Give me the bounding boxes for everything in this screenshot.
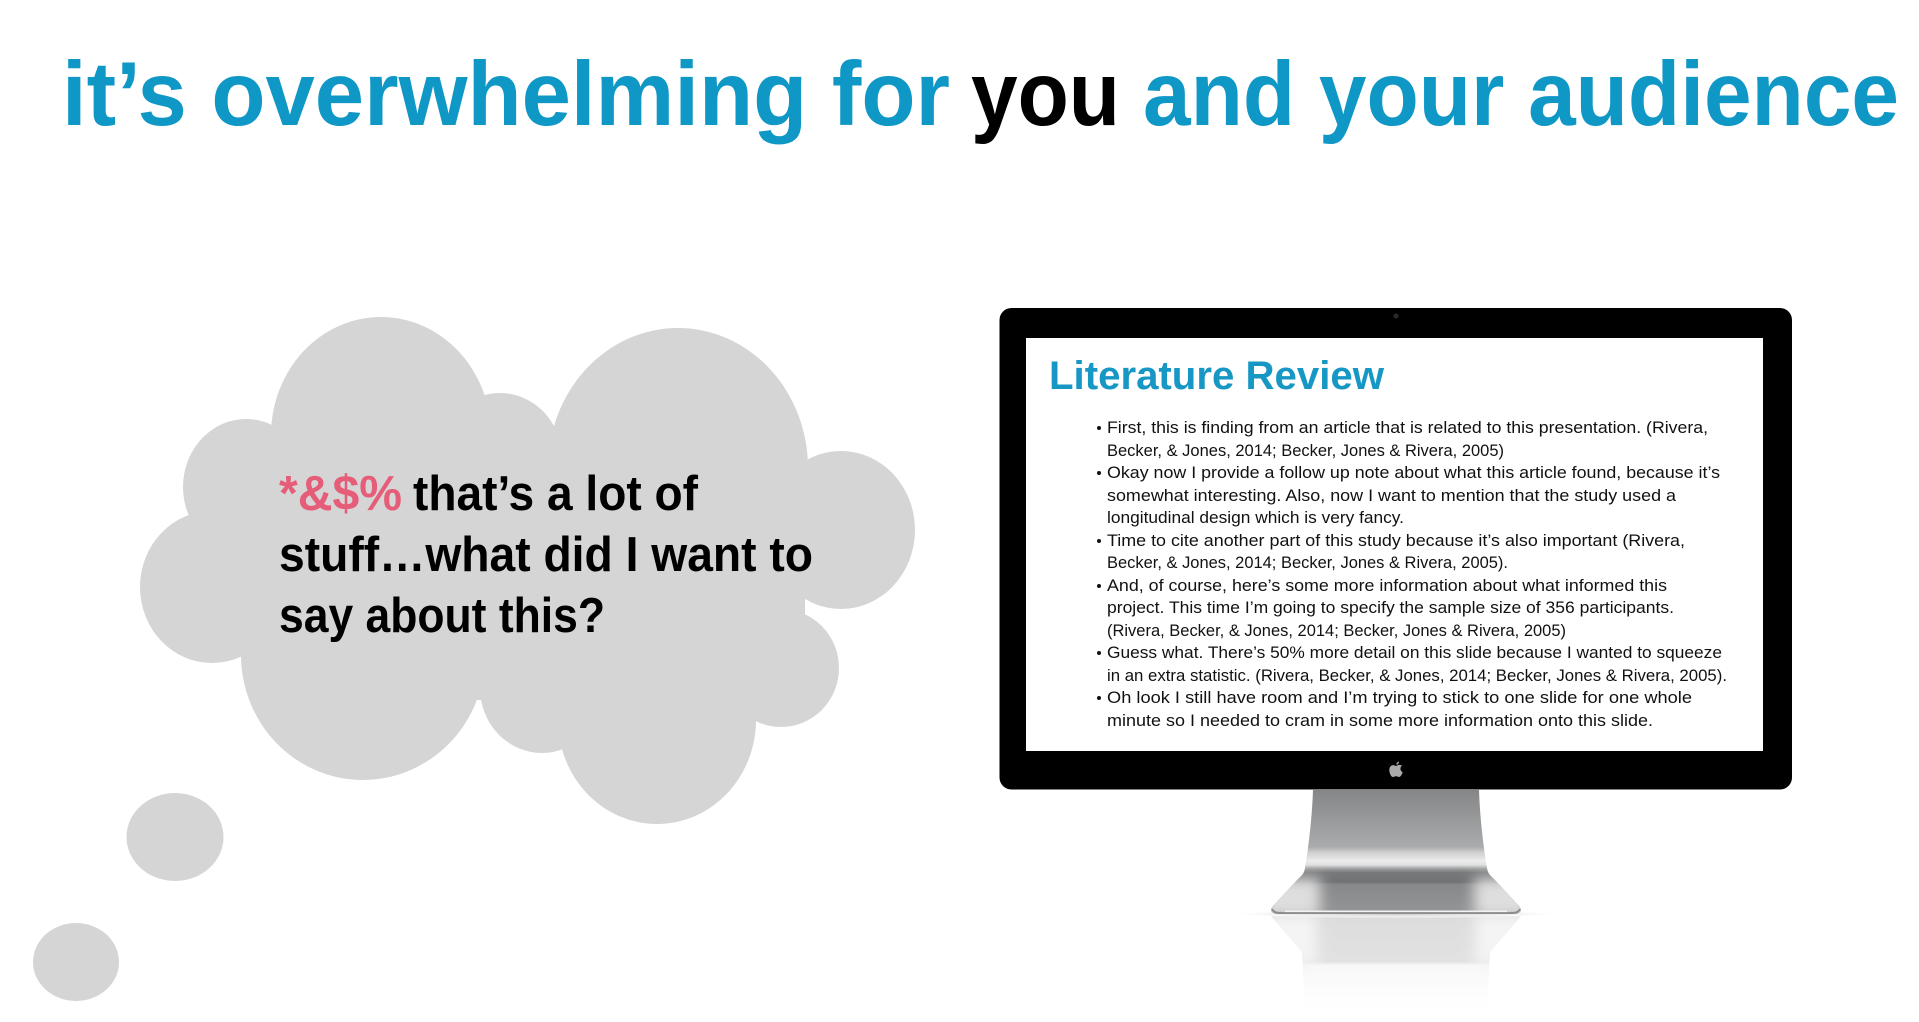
slide heading: Literature Review xyxy=(1049,354,1385,398)
camera xyxy=(1394,314,1398,318)
slide bullets: minute so I needed to cram in some more information onto this slide. xyxy=(1107,711,1653,730)
cloud text: stuff…what did I want to xyxy=(279,528,813,582)
slide bullets: (Rivera, Becker, & Jones, 2014; Becker, Jones & Rivera, 2005) xyxy=(1107,621,1566,640)
monitor stand xyxy=(1264,790,1528,918)
slide bullets xyxy=(1097,418,1727,730)
slide bullets: longitudinal design which is very fancy. xyxy=(1107,508,1404,527)
cloud text: *&$% xyxy=(279,467,402,521)
slide bullets: Guess what. There’s 50% more detail on this slide because I wanted to squeeze xyxy=(1107,643,1722,662)
title xyxy=(62,44,1899,145)
icon: apple logo xyxy=(1389,762,1403,777)
monitor bezel xyxy=(1000,308,1792,790)
slide bullets: in an extra statistic. (Rivera, Becker, & Jones, 2014; Becker, Jones & Rivera, 2005). xyxy=(1107,666,1727,685)
slide bullets: Okay now I provide a follow up note about what this article found, because it’s xyxy=(1107,463,1720,482)
cloud text: that’s a lot of xyxy=(413,467,699,521)
slide screen xyxy=(1026,338,1763,751)
slide bullets: Becker, & Jones, 2014; Becker, Jones & Rivera, 2005) xyxy=(1107,441,1504,460)
slide bullets: Time to cite another part of this study because it’s also important (Rivera, xyxy=(1107,531,1685,550)
cloud text: say about this? xyxy=(279,589,605,643)
title: it’s overwhelming for xyxy=(62,44,950,145)
monitor stand reflection xyxy=(1271,916,1521,968)
slide bullets: First, this is finding from an article that is related to this presentation. (Rivera, xyxy=(1107,418,1708,437)
cloud text xyxy=(279,467,813,643)
slide bullets: Oh look I still have room and I’m trying to stick to one slide for one whole xyxy=(1107,688,1692,707)
thought cloud xyxy=(140,317,915,824)
slide bullets: And, of course, here’s some more information about what informed this xyxy=(1107,576,1667,595)
thought bubble: medium xyxy=(126,793,224,881)
slide bullets: project. This time I’m going to specify the sample size of 356 participants. xyxy=(1107,598,1674,617)
title: you xyxy=(971,44,1120,145)
thought bubble: small xyxy=(33,923,119,1001)
slide bullets: somewhat interesting. Also, now I want to mention that the study used a xyxy=(1107,486,1677,505)
slide bullets: Becker, & Jones, 2014; Becker, Jones & Rivera, 2005). xyxy=(1107,553,1508,572)
